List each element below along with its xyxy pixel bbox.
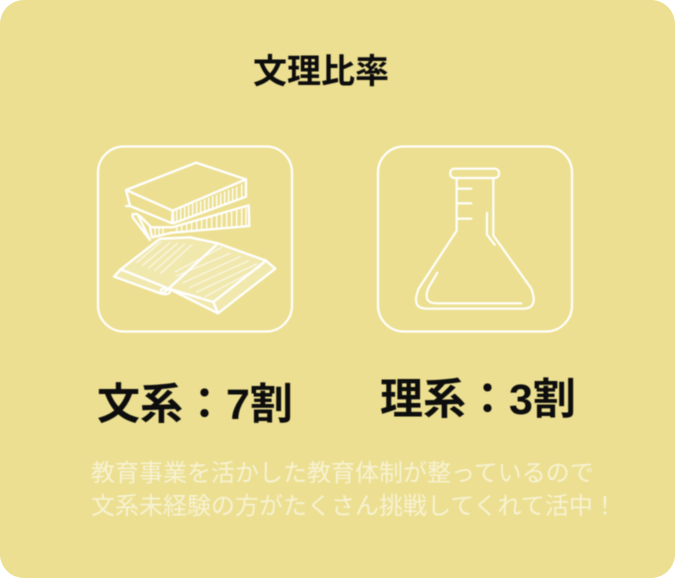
label: sciences 30%: 理系：3割 [380,376,576,424]
label: humanities 70%: 文系：7割 [97,381,293,429]
icon: books [98,146,292,332]
icon: flask [378,146,572,332]
description text: 文系未経験の方がたくさん挑戦してくれて活中！ [91,493,617,520]
title: 文理比率 [253,53,389,91]
description text: 教育事業を活かした教育体制が整っているので [91,460,594,487]
description text [91,460,617,520]
